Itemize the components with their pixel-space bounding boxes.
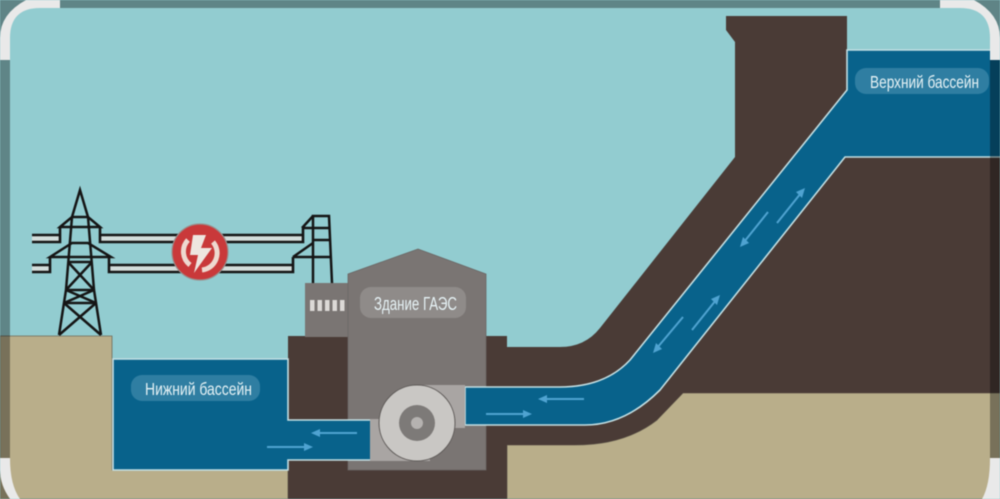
label: plant building — [360, 287, 466, 318]
turbine housing — [370, 385, 465, 461]
bottom-left corner — [0, 458, 20, 499]
top-right corner — [940, 0, 1000, 60]
top-left corner — [0, 0, 60, 60]
plant building — [348, 249, 486, 470]
flow arrows — [267, 188, 805, 451]
label: lower basin — [131, 375, 260, 401]
label: plant building: Здание ГАЭС — [374, 294, 457, 314]
right transmission tower — [293, 216, 332, 283]
lower basin water — [113, 359, 372, 470]
label: lower basin: Нижний бассейн — [145, 379, 252, 399]
ground: beige terrain — [0, 336, 1000, 499]
bottom-right corner — [982, 458, 1000, 499]
wire spacing fill — [32, 238, 303, 268]
upper basin and penstock water — [465, 50, 1000, 425]
left transmission tower — [50, 190, 111, 335]
annex building — [305, 283, 349, 337]
power line wires — [32, 227, 303, 272]
ground: brown rock and dam — [288, 16, 1000, 499]
label: upper basin — [855, 68, 989, 94]
turbine — [379, 385, 455, 461]
icon: electricity badge — [172, 224, 228, 280]
